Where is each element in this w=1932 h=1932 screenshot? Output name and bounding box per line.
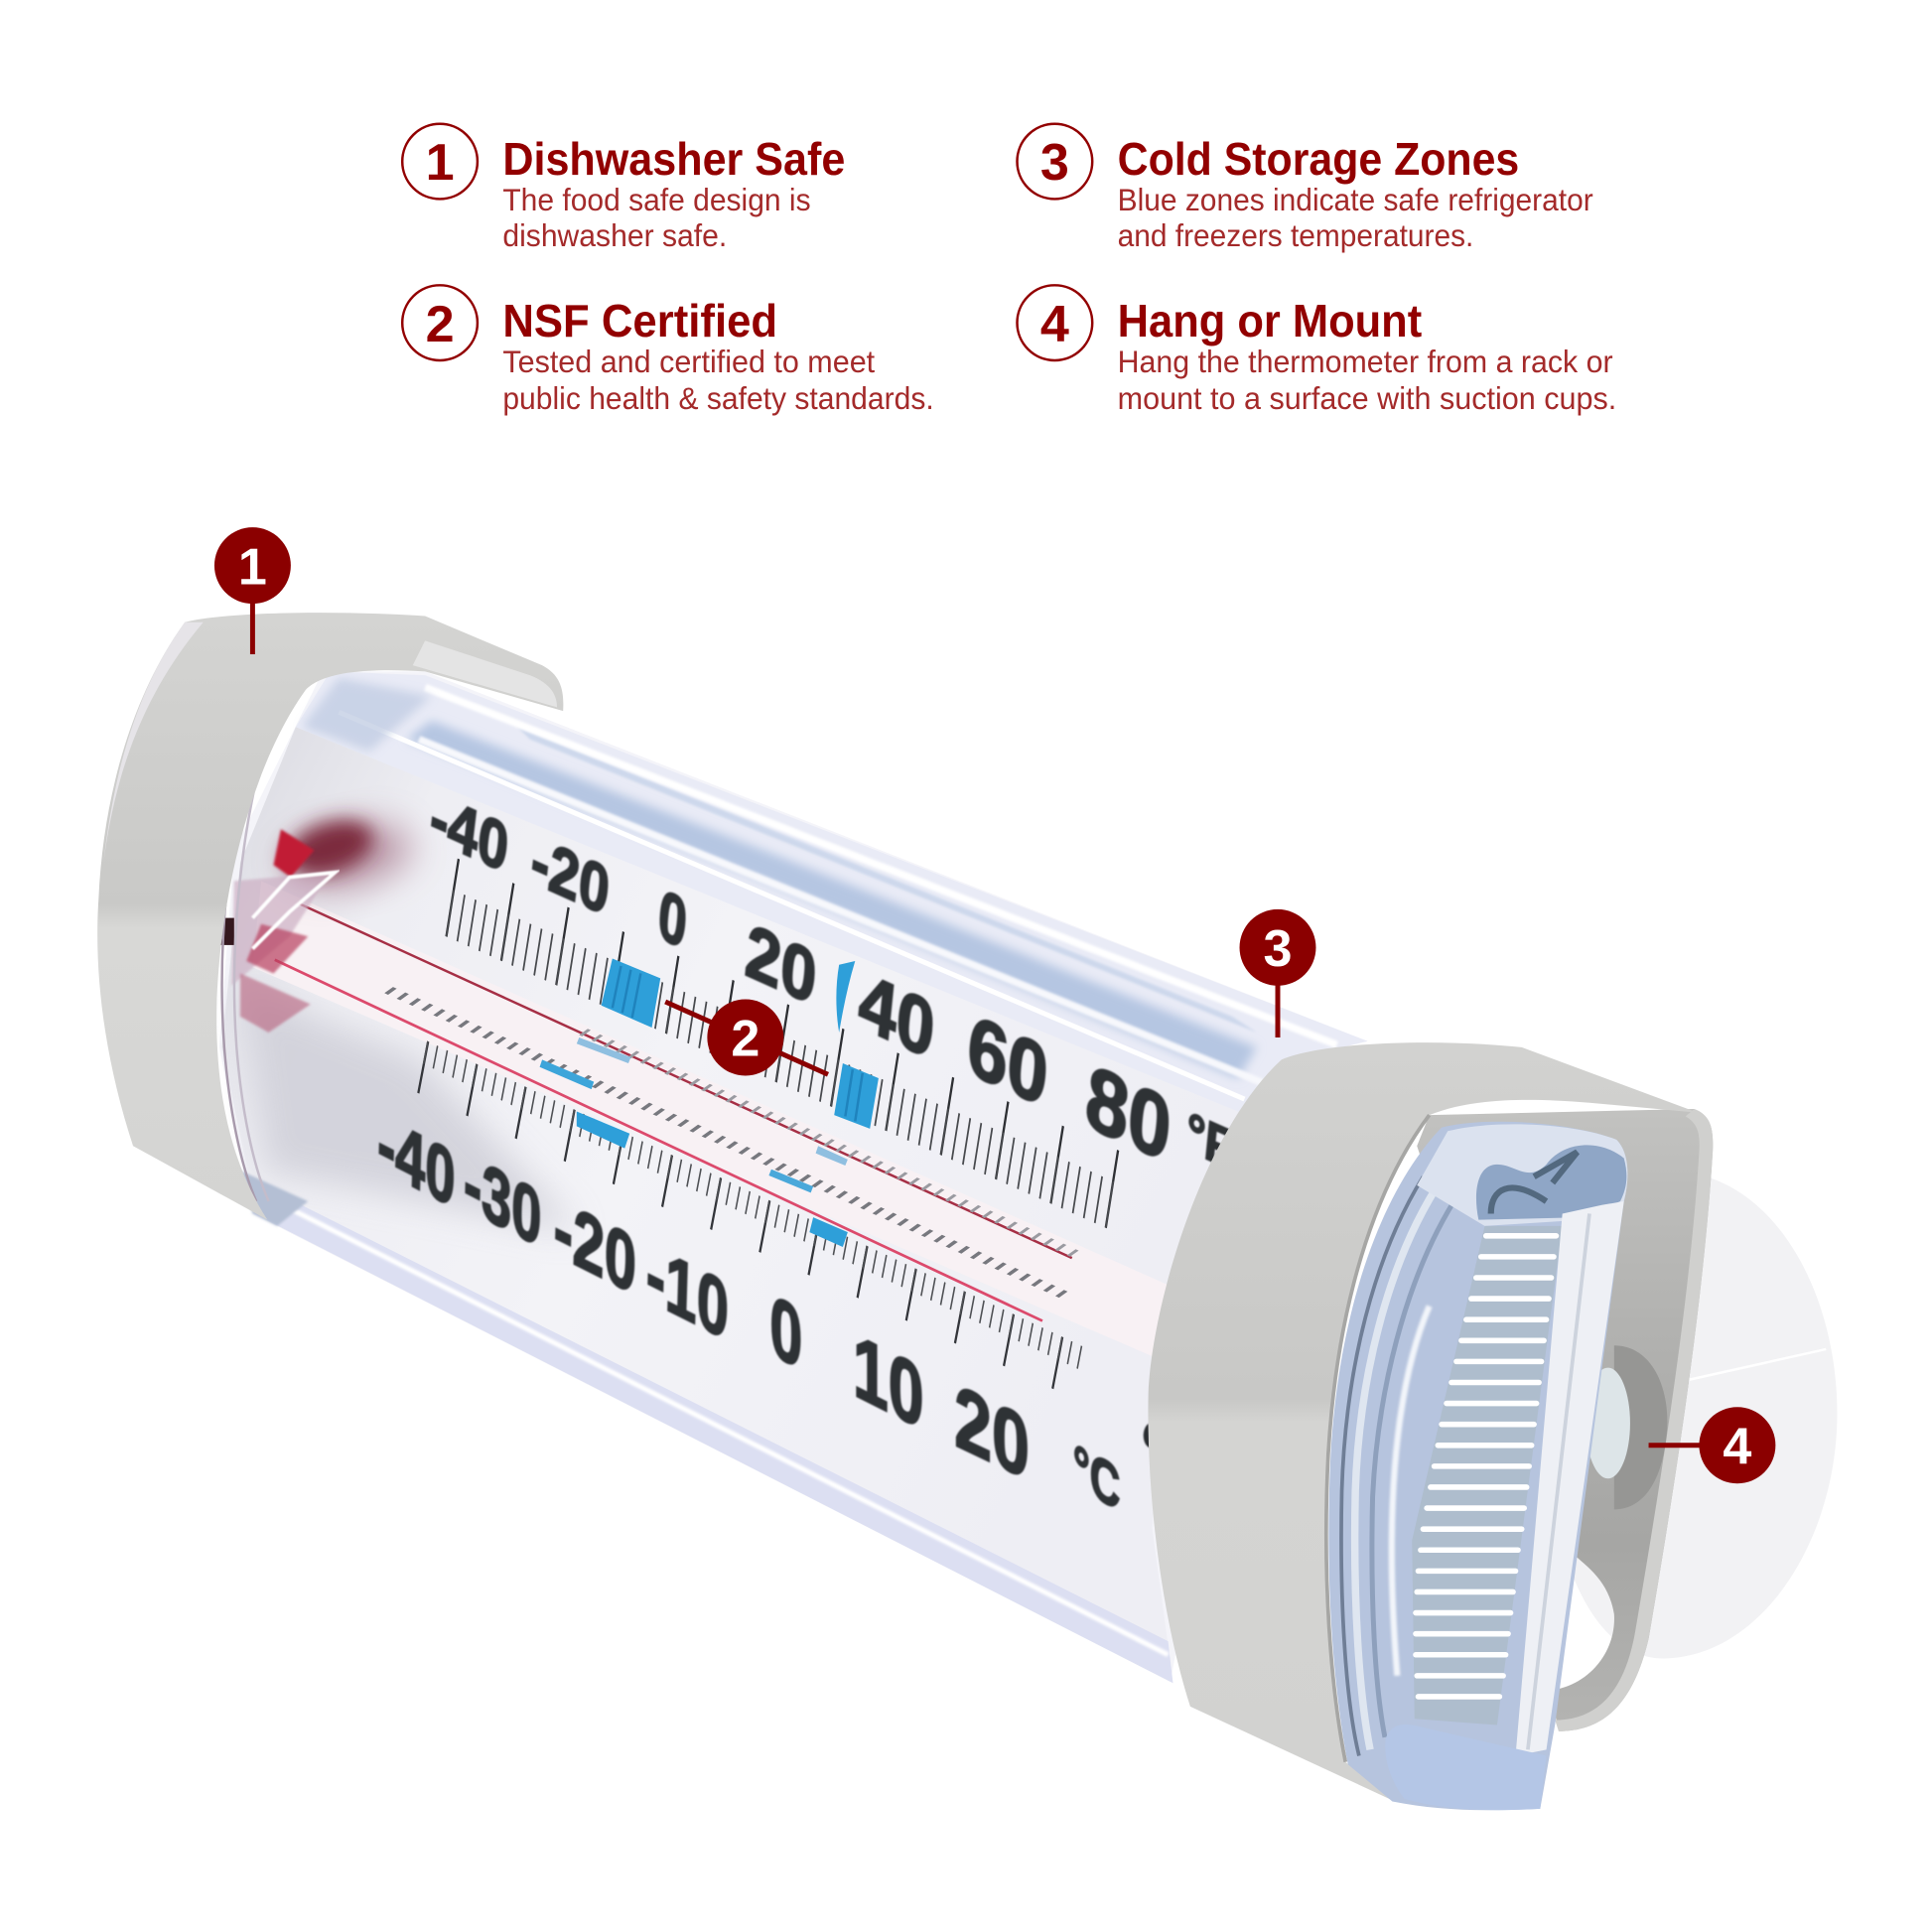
- celsius numerals: -10: [645, 1225, 730, 1358]
- blue marker: [836, 961, 855, 1033]
- glass capillary tube: [252, 881, 1176, 1361]
- legend item 4: hang or mount: Hang the thermometer from a rack or: [1118, 345, 1613, 379]
- fahrenheit numerals: °F: [1183, 1101, 1236, 1182]
- callout marker 2: [665, 1000, 828, 1075]
- fahrenheit numerals: 0: [655, 875, 690, 965]
- left ribs: [1341, 1176, 1453, 1756]
- callout marker 4: 4: [1723, 1418, 1751, 1475]
- bottom blue block: [1385, 1725, 1547, 1810]
- callout marker 3: [1240, 909, 1315, 1037]
- blue zone: freezer (fahrenheit): [602, 959, 660, 1028]
- lower glass edge: [252, 1180, 1173, 1683]
- legend item 3: cold storage zones: [1018, 124, 1593, 253]
- right end cap: [1148, 1042, 1698, 1801]
- fahrenheit numerals: [427, 779, 1236, 1182]
- blue zones: celsius scale: [540, 1037, 848, 1247]
- celsius numerals: -40: [376, 1096, 457, 1224]
- callout marker 1: [214, 527, 291, 654]
- legend item 4: hang or mount: [1018, 285, 1616, 416]
- legend item 3: cold storage zones: Cold Storage Zones: [1118, 133, 1519, 185]
- legend item 3: cold storage zones: Blue zones indicate safe refrigerator: [1118, 183, 1593, 217]
- legend item 1: dishwasher safe: 1: [426, 134, 455, 192]
- fahrenheit numerals: 20: [742, 908, 820, 1022]
- callout marker 4: [1649, 1407, 1775, 1483]
- fahrenheit numerals: 60: [963, 997, 1052, 1126]
- legend item 2: NSF certified: [402, 285, 934, 416]
- upper hatch: [584, 1032, 1083, 1258]
- callout marker 1: 1: [238, 538, 267, 596]
- lower hatch: [389, 990, 1065, 1296]
- celsius numerals: -30: [463, 1136, 543, 1264]
- mounting bolt: [1586, 1345, 1667, 1509]
- fahrenheit scale ticks: [449, 897, 1117, 1207]
- fahrenheit numerals: -20: [527, 822, 614, 930]
- suction cup: [1571, 1176, 1837, 1658]
- callout marker 2: 2: [731, 1011, 759, 1068]
- legend item 2: NSF certified: 2: [426, 296, 455, 353]
- celsius numerals: -20: [553, 1179, 637, 1312]
- celsius numerals: 20: [954, 1365, 1030, 1500]
- top ridge detail: [1417, 1124, 1627, 1226]
- legend item 1: dishwasher safe: The food safe design is: [502, 183, 811, 217]
- legend item 1: dishwasher safe: [402, 124, 845, 253]
- thermometer bulb: [220, 735, 418, 1201]
- thermometer illustration: [97, 613, 1837, 1810]
- legend item 2: NSF certified: Tested and certified to meet: [502, 345, 876, 379]
- scale face: [221, 727, 1247, 1645]
- celsius scale ticks: [422, 1052, 1084, 1374]
- legend item 3: cold storage zones: and freezers temperatures.: [1118, 218, 1473, 253]
- legend item 4: hang or mount: mount to a surface with suction cups.: [1118, 381, 1616, 416]
- celsius numerals: [376, 1096, 1159, 1524]
- legend item 4: hang or mount: Hang or Mount: [1118, 295, 1422, 346]
- upper glass band: [296, 671, 1368, 1115]
- ridge lines: [1412, 1226, 1563, 1725]
- callout marker 3: 3: [1263, 920, 1292, 978]
- left end cap: [97, 613, 563, 1220]
- tube body: [219, 671, 1368, 1683]
- legend: feature list: [402, 124, 1616, 416]
- blue zone: refrigerator (fahrenheit): [834, 1063, 879, 1129]
- legend item 1: dishwasher safe: Dishwasher Safe: [502, 133, 845, 185]
- legend item 2: NSF certified: public health & safety standards.: [502, 381, 934, 416]
- celsius numerals: 0: [769, 1276, 802, 1389]
- legend item 2: NSF certified: NSF Certified: [502, 295, 777, 346]
- legend item 3: cold storage zones: 3: [1040, 134, 1069, 192]
- celsius numerals: 10: [853, 1315, 924, 1449]
- side strip: [1516, 1201, 1624, 1756]
- fahrenheit numerals: -40: [427, 779, 512, 888]
- legend item 4: hang or mount: 4: [1040, 296, 1069, 353]
- right bracket: [1417, 1109, 1713, 1731]
- fahrenheit numerals: 80: [1081, 1045, 1175, 1181]
- celsius numerals: °C: [1073, 1431, 1120, 1524]
- legend item 1: dishwasher safe: dishwasher safe.: [502, 218, 727, 253]
- fahrenheit numerals: 40: [855, 955, 938, 1076]
- clear end plastic: [1328, 1122, 1627, 1810]
